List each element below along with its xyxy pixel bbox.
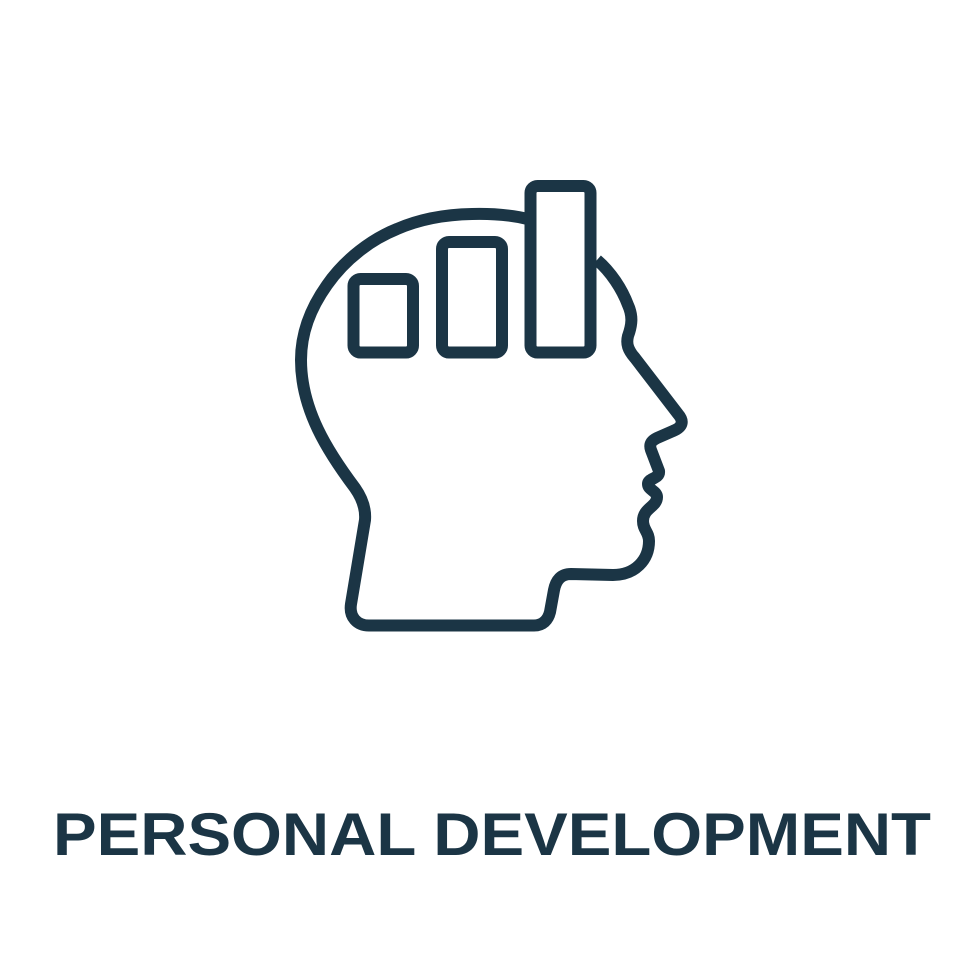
medium bar — [442, 242, 502, 352]
tall bar — [530, 186, 590, 352]
icon: head with rising bars — [301, 186, 682, 626]
small bar — [354, 279, 413, 352]
title: PERSONAL DEVELOPMENT — [53, 801, 931, 868]
head profile outline — [301, 214, 682, 626]
